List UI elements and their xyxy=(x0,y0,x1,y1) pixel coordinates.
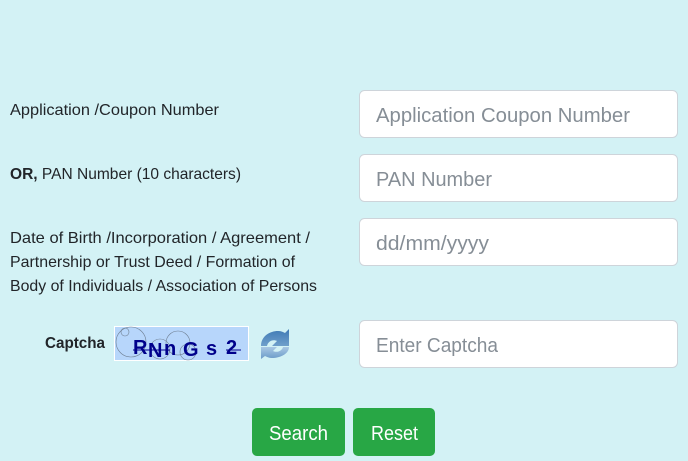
button: reset: Reset xyxy=(371,423,418,445)
label: date of birth: Body of Individuals / Association of Persons xyxy=(10,278,317,295)
label: application coupon number: Application /Coupon Number xyxy=(10,102,220,119)
button: search xyxy=(252,408,345,456)
input: application coupon number xyxy=(360,90,678,138)
captcha image xyxy=(114,326,248,362)
button: search: Search xyxy=(269,423,328,445)
captcha image: R xyxy=(133,337,148,359)
input: date of birth xyxy=(360,218,678,266)
label: date of birth: Partnership or Trust Deed / Formation of xyxy=(10,254,296,271)
label: captcha: Captcha xyxy=(45,335,105,352)
label: date of birth xyxy=(10,230,317,295)
input: date of birth: dd/mm/yyyy xyxy=(376,233,489,255)
captcha image: 2 xyxy=(226,337,237,359)
input: PAN number: PAN Number xyxy=(376,169,492,191)
label: date of birth: Date of Birth /Incorporation / Agreement / xyxy=(10,230,311,247)
input: application coupon number: Application Coupon Number xyxy=(376,105,630,127)
captcha image: n xyxy=(164,338,176,360)
captcha image: N xyxy=(148,340,162,362)
input: PAN number xyxy=(360,154,678,202)
icon: refresh captcha xyxy=(261,329,289,359)
label: PAN number: OR, PAN Number (10 characters) xyxy=(10,166,241,183)
captcha image: G xyxy=(183,339,199,361)
input: captcha: Enter Captcha xyxy=(376,335,499,357)
button: reset xyxy=(353,408,435,456)
captcha image: s xyxy=(206,338,217,360)
input: captcha xyxy=(360,320,678,368)
